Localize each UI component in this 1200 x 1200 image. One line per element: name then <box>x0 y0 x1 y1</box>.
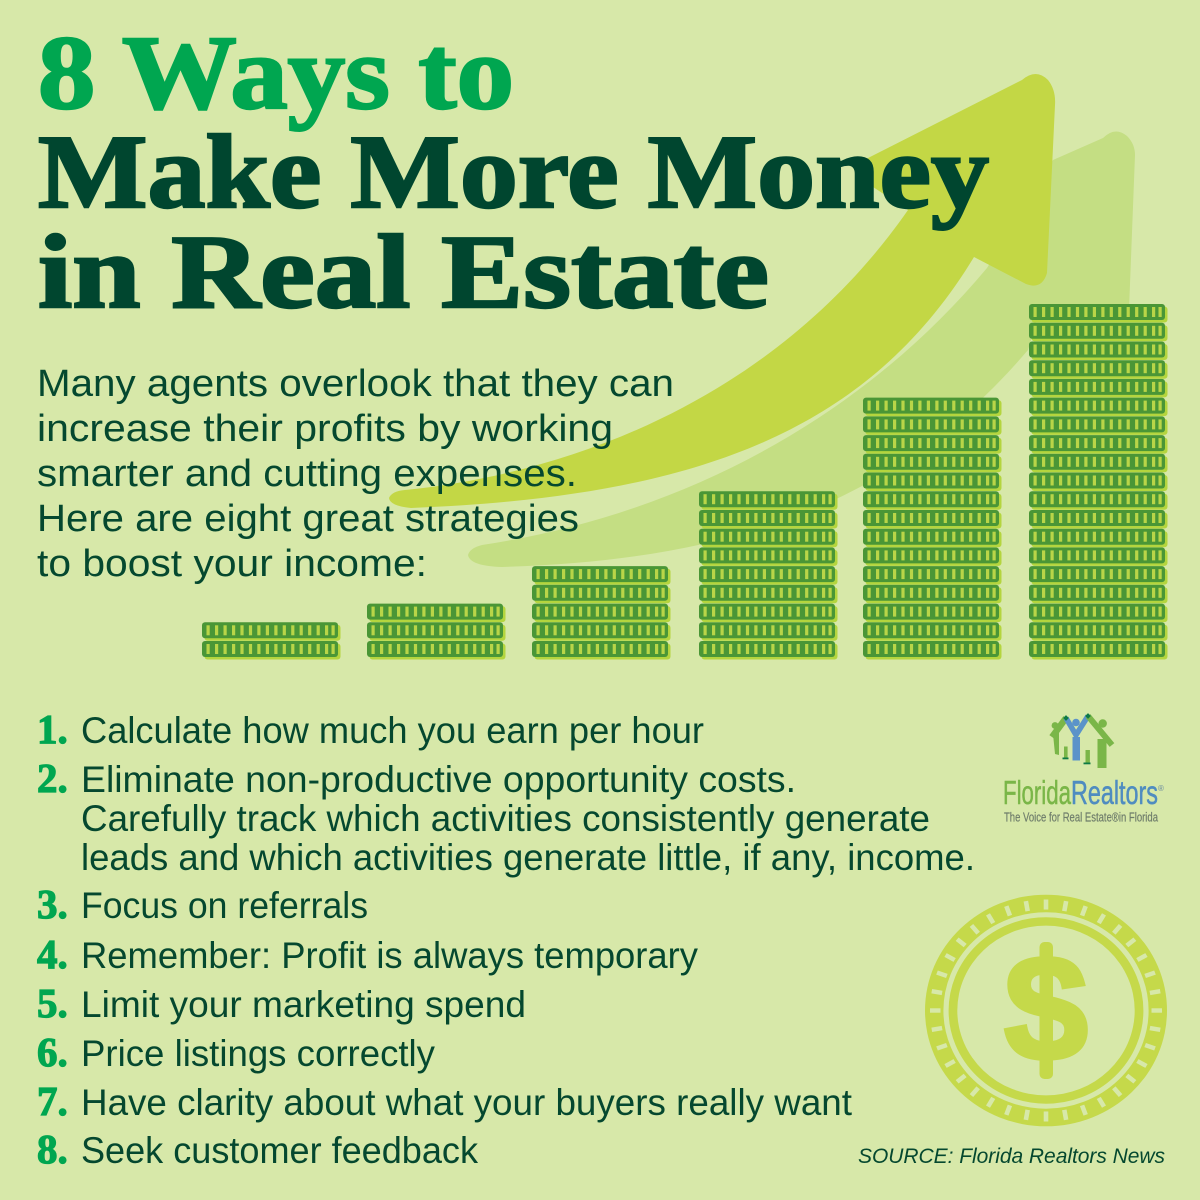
logo wordmark: Florida <box>1003 774 1071 811</box>
item 2: leads and which activities generate little, if any, income. <box>81 837 975 878</box>
coin stack: 3 coins <box>367 604 506 660</box>
item 1: Calculate how much you earn per hour <box>81 710 704 751</box>
item 5: Limit your marketing spend <box>81 984 526 1025</box>
intro paragraph <box>37 363 674 585</box>
source credit: SOURCE: Florida Realtors News <box>858 1145 1166 1168</box>
icon: house of people <box>1052 713 1112 768</box>
item 2 <box>37 755 975 878</box>
title: 8 Ways to <box>38 14 514 131</box>
registered mark: ® <box>1158 784 1164 793</box>
item 3: Focus on referrals <box>81 885 368 926</box>
item 6: 6. <box>37 1029 68 1075</box>
item 7: 7. <box>37 1078 68 1124</box>
item 8: Seek customer feedback <box>81 1130 478 1171</box>
coin stack: 2 coins <box>202 622 340 660</box>
title: in Real Estate <box>38 213 769 330</box>
coin stack: 14 coins <box>863 398 1002 660</box>
icon: dollar coin: $ <box>1004 924 1088 1092</box>
coin stack: 9 coins <box>699 491 838 660</box>
item 1: 1. <box>37 706 68 752</box>
item 6: Price listings correctly <box>81 1033 435 1074</box>
logo wordmark: Realtors <box>1071 774 1158 811</box>
list of eight strategies <box>37 706 975 1172</box>
intro paragraph: Many agents overlook that they can <box>37 363 674 405</box>
arrow: pale background arrow <box>468 131 1135 567</box>
item 8: 8. <box>37 1126 68 1172</box>
intro paragraph: increase their profits by working <box>37 408 613 450</box>
item 3: 3. <box>37 881 68 927</box>
item 4: Remember: Profit is always temporary <box>81 935 698 976</box>
item 5: 5. <box>37 980 68 1026</box>
icon: dollar coin <box>925 895 1167 1126</box>
intro paragraph: Here are eight great strategies <box>37 498 579 540</box>
title <box>38 14 989 330</box>
item 4: 4. <box>37 931 68 977</box>
logo: Florida Realtors <box>1003 713 1164 824</box>
arrow: main rising arrow <box>389 74 1055 508</box>
item 2: 2. <box>37 755 68 801</box>
item 2: Eliminate non-productive opportunity costs. <box>81 759 796 800</box>
coin stack: 19 coins <box>1029 304 1168 660</box>
title: Make More Money <box>38 113 989 230</box>
item 2: Carefully track which activities consistently generate <box>81 798 930 839</box>
intro paragraph: to boost your income: <box>37 543 427 585</box>
intro paragraph: smarter and cutting expenses. <box>37 453 577 495</box>
logo wordmark <box>1003 774 1158 811</box>
coin stack: 5 coins <box>532 566 670 660</box>
item 7: Have clarity about what your buyers really want <box>81 1082 853 1123</box>
